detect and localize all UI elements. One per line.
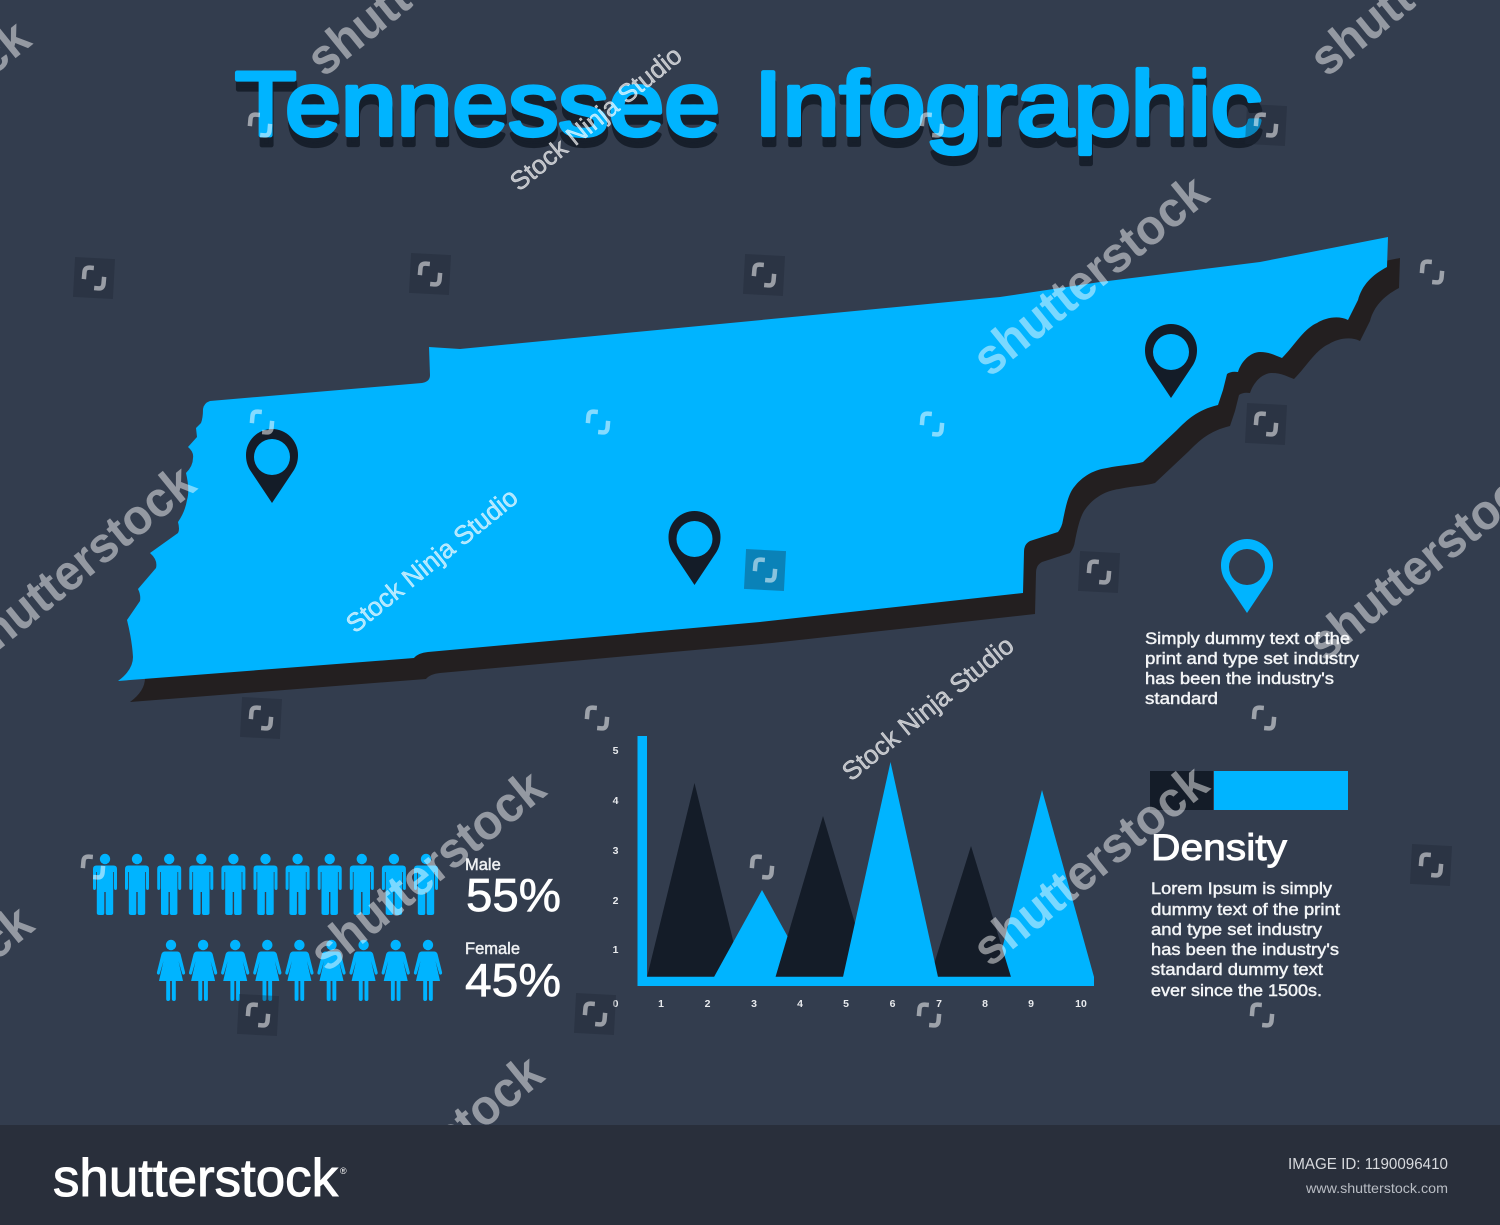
y axis labels: 2: [613, 895, 619, 907]
triangle 4 blue: [843, 762, 938, 977]
x axis labels: 8: [982, 998, 988, 1010]
watermark words: shutterstock: [299, 759, 556, 982]
density body text: Lorem Ipsum is simply: [1151, 880, 1333, 898]
studio watermark words: [340, 40, 1020, 787]
female statistic: Female: [465, 940, 520, 958]
density legend bar: [1150, 771, 1348, 810]
watermark words: shutterstock: [962, 754, 1219, 977]
x axis labels: 9: [1028, 998, 1034, 1010]
male statistic: 55%: [466, 869, 561, 921]
density body text: dummy text of the print: [1151, 901, 1340, 919]
title: [235, 54, 1263, 165]
location note text: has been the industry's: [1145, 670, 1334, 688]
density body text: ever since the 1500s.: [1151, 982, 1322, 1000]
triangle 2 blue: [714, 890, 810, 977]
x axis labels: 1: [658, 998, 664, 1010]
male pictogram row: [93, 854, 438, 915]
female pictogram row: [157, 940, 442, 1001]
icon: blue location pin: [1221, 539, 1273, 613]
density body text: and type set industry: [1151, 921, 1323, 939]
density body text: [1151, 880, 1340, 1000]
icon: location pin central: [668, 511, 720, 585]
panel: location note: [1145, 539, 1360, 708]
female statistic: 45%: [465, 954, 561, 1006]
density body text: has been the industry's: [1151, 941, 1339, 959]
title: Infographic: [754, 54, 1262, 155]
icon: location pin west: [246, 429, 298, 503]
footer logo: ®: [340, 1166, 347, 1176]
y axis labels: 0: [613, 998, 619, 1010]
studio watermark words: Stock Ninja Studio: [836, 630, 1020, 787]
x axis labels: 7: [936, 998, 942, 1010]
y axis labels: 5: [613, 745, 619, 757]
image id: IMAGE ID: 1190096410: [1288, 1156, 1448, 1173]
y axis labels: 1: [613, 944, 619, 956]
male statistic: Male: [465, 856, 501, 874]
watermark marks: [73, 104, 1452, 1036]
title: Tennessee: [235, 54, 720, 155]
location note text: print and type set industry: [1145, 650, 1360, 668]
x axis labels: 5: [843, 998, 849, 1010]
map shape: [118, 237, 1388, 681]
map shadow: [130, 258, 1400, 702]
x axis labels: 2: [705, 998, 711, 1010]
triangle 5 dark: [930, 846, 1011, 977]
studio watermark words: Stock Ninja Studio: [340, 482, 524, 639]
density heading: Density: [1151, 827, 1288, 868]
x axis labels: [658, 998, 1087, 1010]
y axis labels: 3: [613, 845, 619, 857]
chart: triangle column chart: [613, 736, 1094, 1010]
footer logo: shutterstock: [53, 1149, 338, 1208]
density body text: standard dummy text: [1151, 961, 1323, 979]
y axis labels: 4: [613, 795, 619, 807]
x axis labels: 3: [751, 998, 757, 1010]
panel: gender population: [93, 854, 561, 1006]
x axis labels: 6: [890, 998, 896, 1010]
map: Tennessee state with location pins: [118, 237, 1400, 702]
triangle 6 blue: [995, 790, 1094, 977]
studio watermark words: Stock Ninja Studio: [504, 40, 688, 197]
x axis labels: 10: [1075, 998, 1087, 1010]
footer bar: [0, 1125, 1500, 1225]
triangle 3 dark: [776, 816, 871, 977]
icon: location pin east: [1145, 324, 1197, 398]
y axis labels: [613, 745, 619, 1010]
location note text: [1145, 630, 1360, 708]
triangle 1 dark: [647, 783, 742, 977]
title: Tennessee: [236, 64, 721, 165]
footer url: www.shutterstock.com: [1305, 1180, 1448, 1196]
title: Infographic: [755, 64, 1263, 165]
watermark words: shutterstock: [962, 164, 1219, 387]
panel: density: [1150, 771, 1348, 1000]
x axis labels: 4: [797, 998, 803, 1010]
chart axes: [638, 736, 1094, 986]
location note text: Simply dummy text of the: [1145, 630, 1350, 648]
location note text: standard: [1145, 690, 1218, 708]
